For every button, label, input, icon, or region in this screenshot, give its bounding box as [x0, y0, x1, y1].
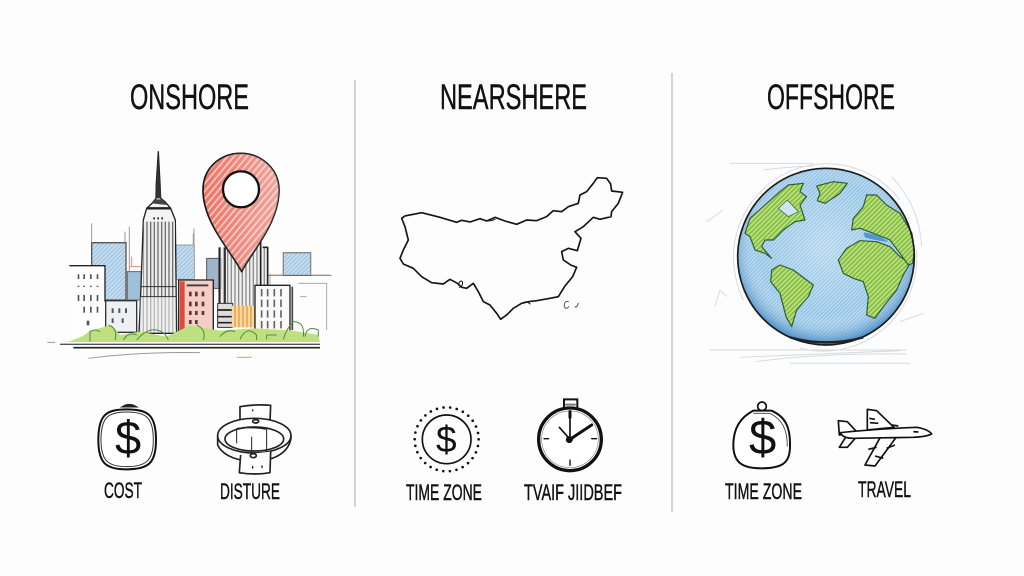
- label: garbled timer caption: TVAIF JIIDBEF: [524, 480, 622, 505]
- icon: cost money bag: [98, 405, 156, 469]
- illustration: globe: [707, 163, 923, 363]
- icon: dollar coin with dotted ring: [415, 407, 479, 471]
- label: cost: COST: [104, 478, 142, 503]
- panel: offshore: [707, 78, 932, 504]
- heading: onshore: ONSHORE: [130, 78, 249, 117]
- illustration: city skyline with location pin: [47, 152, 332, 358]
- icon: stopwatch: [539, 399, 601, 471]
- label: time zone: TIME ZONE: [406, 480, 482, 505]
- icon: belt: [218, 405, 291, 474]
- label: disture: DISTURE: [220, 479, 280, 504]
- illustration: region outline map: [400, 178, 623, 319]
- panel: onshore: [47, 78, 332, 504]
- heading: nearshore: NEARSHERE: [440, 78, 587, 117]
- icon: dollar sign: $: [436, 419, 457, 460]
- icon: dollar sign: $: [115, 411, 141, 464]
- heading: offshore: OFFSHORE: [767, 78, 895, 117]
- panel: nearshore: [400, 78, 623, 505]
- icon: dollar sign: $: [749, 411, 776, 465]
- icon: airplane: [838, 409, 932, 466]
- label: time zone: TIME ZONE: [725, 479, 802, 504]
- icon: location pin: [203, 153, 279, 272]
- icon: money bag: [733, 402, 790, 468]
- label: travel: TRAVEL: [858, 477, 911, 502]
